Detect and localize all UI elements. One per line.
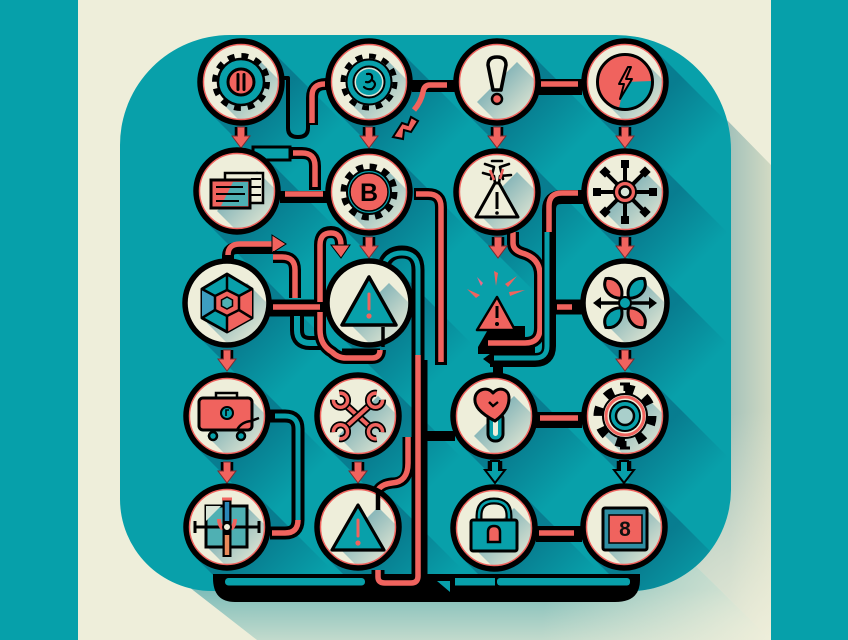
pipe: flower link (552, 300, 584, 314)
side band: right (771, 0, 848, 640)
pipe: flask branch around warning (478, 232, 540, 354)
node: padlock (453, 487, 554, 588)
pipe: document to bitcoin (280, 194, 330, 197)
node: large warning (327, 261, 429, 363)
icon: free warning with burst rays (467, 271, 525, 330)
pipe: heart stub to riser (427, 431, 455, 441)
side band: left (0, 0, 78, 640)
pipe: hexagon to warning (268, 307, 328, 308)
node: lightning pie (584, 41, 685, 142)
node: cross valve (186, 486, 287, 587)
node: virus hub (584, 151, 685, 252)
calendar number: 8 (619, 518, 631, 541)
pipe: gear to alert with broken segment (393, 85, 456, 139)
long shadows cast by the nodes (196, 51, 728, 631)
pipe: tanker to cross (270, 416, 298, 533)
rounded teal panel (120, 35, 731, 591)
node: documents (196, 150, 297, 251)
node: calendar (583, 486, 684, 587)
node: exclamation alert (456, 41, 557, 142)
node: teal core gear (328, 41, 429, 142)
pipe: warning base plate (478, 326, 525, 347)
node: crossed wrenches (317, 375, 418, 476)
pipe: bitcoin long drop (414, 194, 441, 365)
pipe: top-left gear loop (283, 78, 326, 137)
bottom collector bar (213, 574, 640, 602)
node: hexagon gem (185, 261, 287, 363)
node: bitcoin gear (328, 151, 429, 252)
pipe: lock to calendar (536, 533, 582, 534)
node: warning triangle (317, 486, 418, 587)
pipe: hexagon arrow return (228, 235, 286, 262)
pipe: upper arc into hexagon line (273, 257, 295, 298)
pipe: heart to gear (536, 418, 582, 420)
arrows between nodes (218, 127, 634, 483)
pipe: alert to lightning (538, 84, 582, 87)
pipe: upper document connector (253, 147, 315, 190)
pipe: virus return with arrowhead (483, 193, 583, 374)
bitcoin letter: B (360, 179, 378, 207)
node: heart key (453, 375, 554, 476)
pipe: arched teal riser and pink bottom return (378, 252, 425, 586)
pipe: under warning sweep (320, 312, 380, 358)
node: ring gear (584, 375, 685, 476)
node: tanker (186, 375, 287, 476)
pipe: loop arrow into warning (320, 232, 350, 302)
panel long drop shadow (180, 115, 771, 640)
node: red core gear (200, 41, 301, 142)
pipe: teal return below hexagon (297, 315, 322, 343)
node: flower with arrows (583, 261, 685, 363)
pipe: short pink branch to lower warning (378, 437, 408, 490)
node: flask warning (456, 151, 557, 252)
